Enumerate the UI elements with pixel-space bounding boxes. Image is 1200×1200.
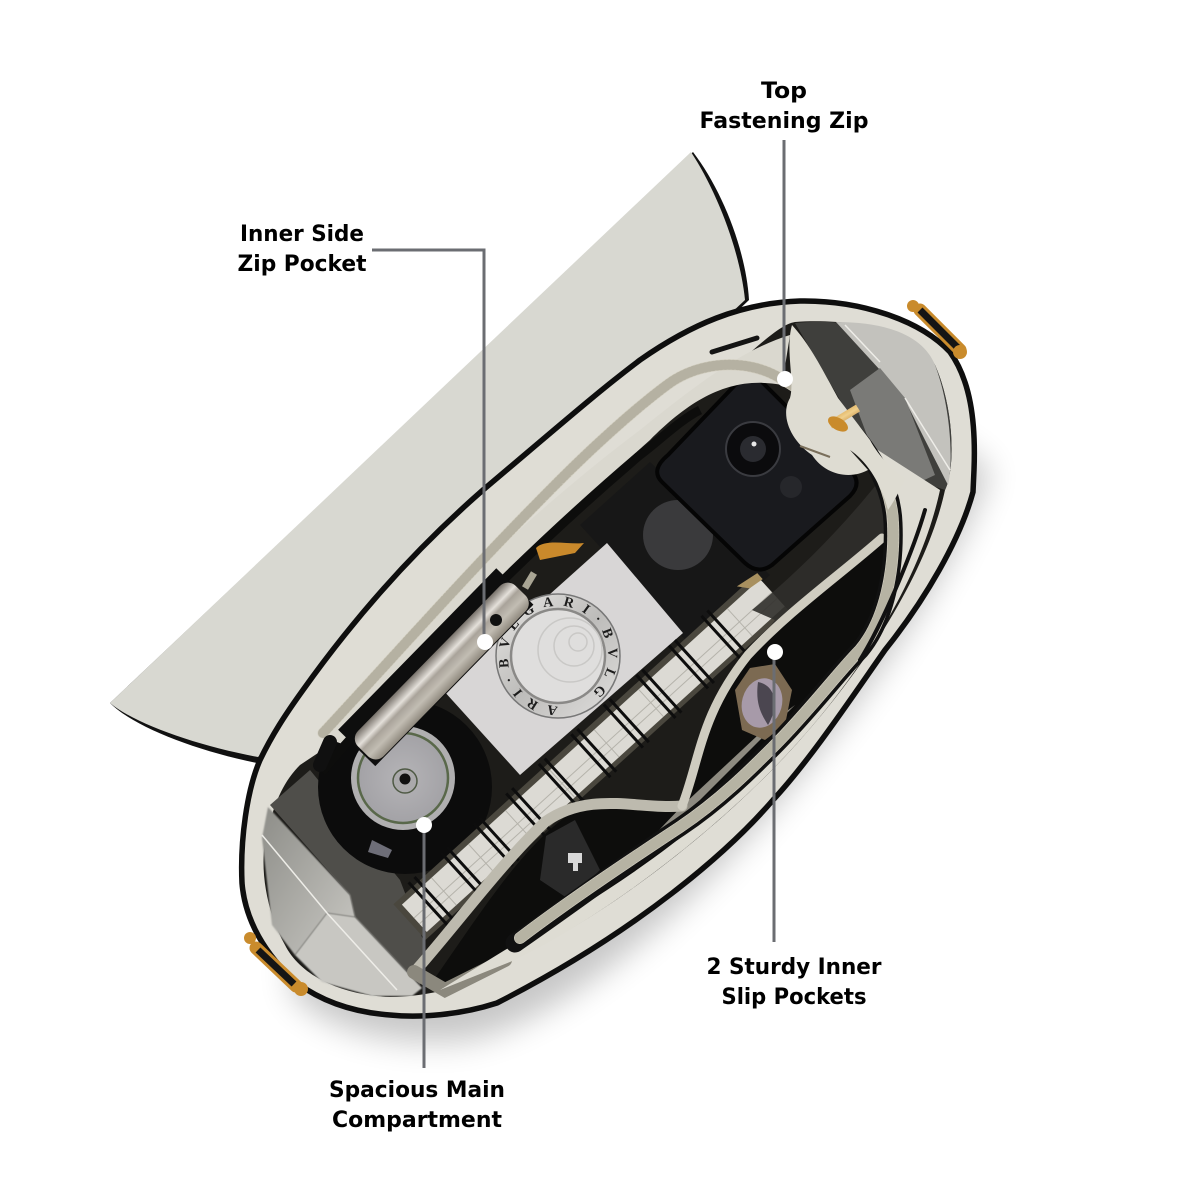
- gold strap hardware: top right: [907, 300, 967, 359]
- callout: inner slip pockets: [706, 644, 882, 1010]
- small bottle in slip pocket: [540, 820, 600, 900]
- callout: spacious main compartment: [329, 817, 505, 1133]
- slip pocket interior: [430, 480, 885, 985]
- callout: inner side zip pocket: [238, 222, 493, 650]
- callout: spacious main compartment: Compartment: [332, 1108, 502, 1133]
- bag drop shadow: [290, 330, 990, 1043]
- icon: magnetic round pad: [643, 500, 713, 570]
- cream pocket panel: [318, 335, 790, 745]
- callout: top fastening zip: Top: [761, 79, 807, 104]
- right end lining: [795, 322, 952, 490]
- callout: inner slip pockets: 2 Sturdy Inner: [706, 955, 882, 980]
- perfume bottle / watch: [735, 664, 792, 740]
- callout: spacious main compartment: Spacious Main: [329, 1078, 505, 1103]
- left end lining: [262, 770, 425, 996]
- callout: top fastening zip: [700, 79, 868, 387]
- cream rim beside slip pocket zipper: [440, 445, 940, 990]
- white card: [443, 543, 683, 775]
- gold strap hardware: bottom left: [244, 932, 308, 996]
- smartphone with camera: [657, 377, 857, 570]
- jar with round lid: [318, 700, 492, 874]
- spiral notebook: [389, 569, 792, 943]
- metal bar keychain: [338, 542, 584, 766]
- slip pocket divider straps: [414, 538, 882, 990]
- open bag flap: [110, 152, 749, 764]
- callout: inner side zip pocket: Inner Side: [240, 222, 364, 247]
- interior cavity: [263, 321, 952, 997]
- black pocket slit: [322, 410, 700, 772]
- bag body: [238, 298, 978, 1019]
- black tech case under phone: [580, 462, 770, 645]
- inner side pocket zipper: [320, 338, 853, 765]
- callout: inner side zip pocket: Zip Pocket: [238, 252, 367, 277]
- callout: top fastening zip: Fastening Zip: [700, 109, 868, 134]
- silver keyring compact with lettering: ARI·BVLGARI·BVLG: [499, 596, 618, 716]
- callout: inner slip pockets: Slip Pockets: [722, 985, 866, 1010]
- bag outer shell and cream rim: [242, 301, 974, 1016]
- zip end tab with gold rivet: [786, 325, 905, 510]
- slip pocket zipper: [515, 433, 925, 943]
